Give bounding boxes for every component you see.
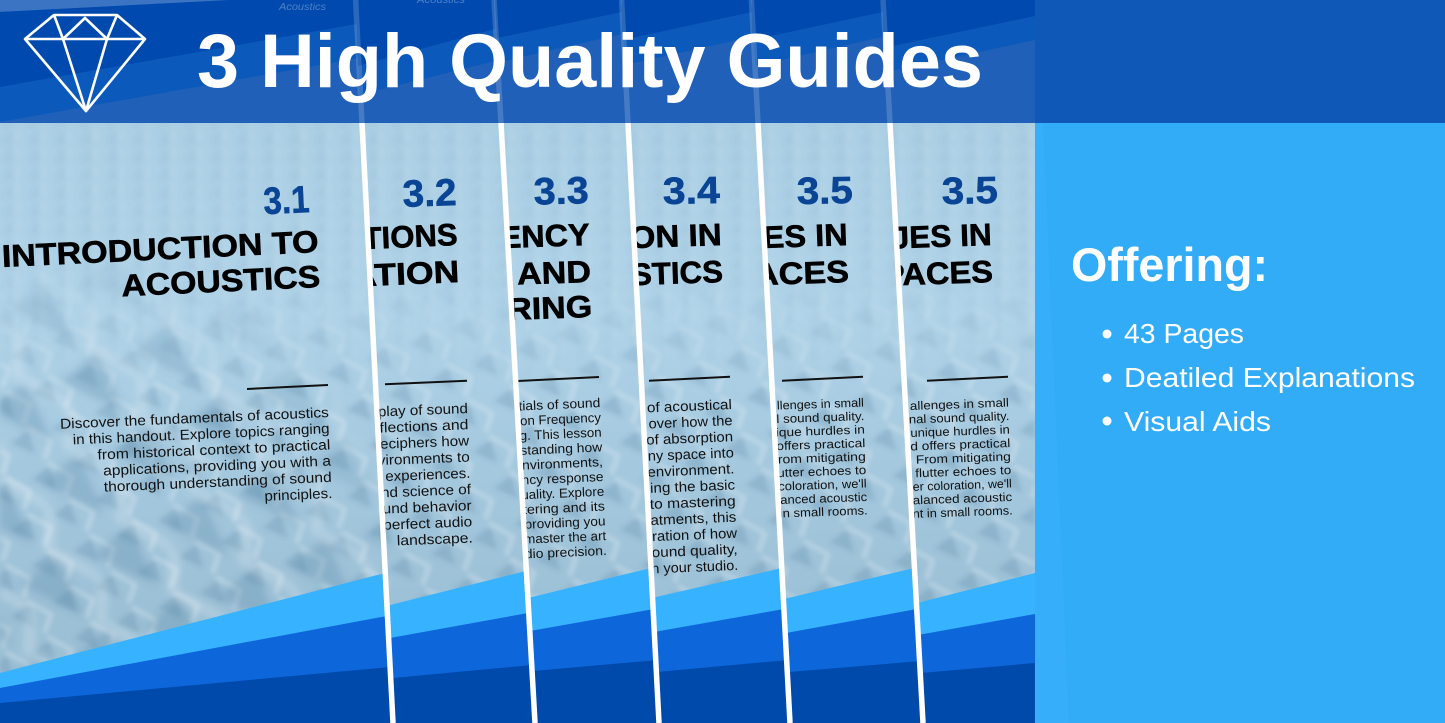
page 5 rule [782,377,863,381]
faint page labels [278,0,465,13]
page 1 description: thorough understanding of sound [104,470,332,496]
page 2 description: experiences. [385,466,471,485]
page 6 description: unique hurdles in [910,422,1010,440]
page 5 description [775,395,868,521]
page 1 rule [247,385,328,389]
page 5 description: llenges in small [777,396,864,413]
page 2 description: nd science of [381,482,471,501]
page 5 description: ique hurdles in [776,422,865,440]
page 5 description: anced acoustic [780,490,867,507]
section number 3.3: 3.3 [533,170,589,213]
section number 3.2: 3.2 [402,172,457,216]
guide page 3 [510,176,606,560]
header banner [0,0,1445,123]
page 5 description: coloration, we'll [778,476,867,494]
page 3 heading [510,223,591,320]
page 4 description: ny space into [647,444,734,464]
page 4 description: ing the basic [650,476,735,496]
page 1 heading [3,230,320,297]
page 4 rule [649,377,730,381]
section number 3.4: 3.4 [662,170,720,213]
page 1 description: applications, providing you with a [103,454,331,479]
offering bullet list [1102,318,1415,437]
page 1 description: principles. [264,486,333,505]
page 6 description: nal sound quality. [909,409,1010,426]
bottom colour wedges on the guide pages [0,568,1035,723]
page 6 rule [927,377,1008,381]
page 3 heading: RING [507,289,593,327]
section number 3.5: 3.5 [796,170,853,213]
guide page 6 [898,176,1012,518]
page 5 description: utter echoes to [777,463,867,480]
page 2 description: perfect audio [383,514,473,534]
page 2 description: landscape. [397,531,473,549]
page 6 description: flutter echoes to [915,463,1012,480]
guide page 2 [370,178,472,546]
page 3 description [517,395,608,561]
page 3 description: ncy response [521,469,604,488]
page 4 description: ration of how [652,525,738,544]
page 3 description: dio precision. [525,543,607,561]
guide page 5 [766,176,867,518]
banner wedges behind title [0,0,1035,123]
page 6 description: er coloration, we'll [913,476,1012,494]
page 1 description: Discover the fundamentals of acoustics [60,405,329,433]
page 1 heading: ACOUSTICS [121,259,321,303]
page 2 description: vironments to [377,450,470,469]
page 3 description: master the art [524,528,607,547]
page 4 heading: STICS [630,254,724,292]
page 5 description: rom mitigating [778,449,866,467]
page 3 heading: ENCY [499,217,591,255]
page 4 description: ound quality, [651,541,738,560]
page 5 description: offers practical [776,436,866,453]
section number 3.5 repeat: 3.5 [941,170,998,213]
page 2 description [376,401,474,550]
offering heading: Offering: [1071,238,1268,291]
page 2 description: flections and [379,417,469,437]
page 4 description: of acoustical [647,396,732,415]
faint page labels: Acoustics [278,2,326,13]
page 3 description: tials of sound [518,395,601,414]
acoustic foam photo background [0,123,1035,723]
page 6 description: d offers practical [910,436,1011,453]
page 6 description: alanced acoustic [912,490,1012,507]
page 2 heading: ATION [350,254,460,294]
page 6 description: nt in small rooms. [912,503,1013,521]
page 4 description: environment. [647,460,735,480]
page 1 heading: INTRODUCTION TO [1,224,319,274]
page 3 description: nvironments, [522,454,603,473]
icon: diamond [25,15,145,111]
section number 3.1: 3.1 [262,179,310,223]
page 2 heading [370,224,458,286]
title: 3 High Quality Guides [197,19,983,104]
guide page 4 [629,170,740,576]
page 4 heading [636,224,722,286]
page 4 description: to mastering [649,493,736,512]
page 3 description: providing you [524,513,606,532]
page 2 rule [385,381,467,384]
page 4 description: n your studio. [651,557,739,576]
page 6 description: . From mitigating [908,449,1011,467]
page 5 description: l sound quality. [776,409,865,426]
page 3 description: g. This lesson [519,425,602,443]
offering bullet list: Deatiled Explanations [1124,362,1415,393]
light edge strip [1035,123,1069,723]
page 4 description: of absorption [646,428,733,448]
page 4 description: over how the [648,412,733,431]
page 2 description: und behavior [382,498,472,518]
page 2 heading: TIONS [362,217,458,256]
page 4 description [645,396,740,576]
panel: offering [1035,123,1415,723]
page 3 heading: AND [516,254,592,292]
page 5 heading: ES IN [762,217,848,255]
page 3 description: uality. Explore [521,484,605,502]
page 3 description: standing how [520,439,603,458]
page 3 description: on Frequency [520,410,602,428]
page 5 description: in small rooms. [779,503,868,521]
offering bullet list: 43 Pages [1124,318,1244,349]
page 1 description [61,408,332,504]
page 4 description: atments, this [650,509,737,528]
offering bullet list: Visual Aids [1124,406,1271,437]
page 1 description: from historical context to practical [97,437,331,464]
page 5 heading [766,224,848,285]
page 2 description: eciphers how [380,433,470,453]
page 6 description [906,395,1013,521]
page 6 description: allenges in small [910,396,1009,413]
page 5 heading: ACES [753,254,850,292]
page 6 heading [898,223,992,286]
page divider lines [362,123,923,723]
page 4 heading: ON IN [629,217,722,255]
faint divider continuation [356,0,890,123]
page 1 description: in this handout. Explore topics ranging [72,421,330,448]
guide page 1 [1,179,333,514]
page 6 heading: PACES [882,254,994,293]
page 6 heading: JES IN [891,217,992,255]
page 2 description: play of sound [378,401,468,420]
page 3 rule [518,377,599,381]
page 3 description: tering and its [523,498,606,517]
